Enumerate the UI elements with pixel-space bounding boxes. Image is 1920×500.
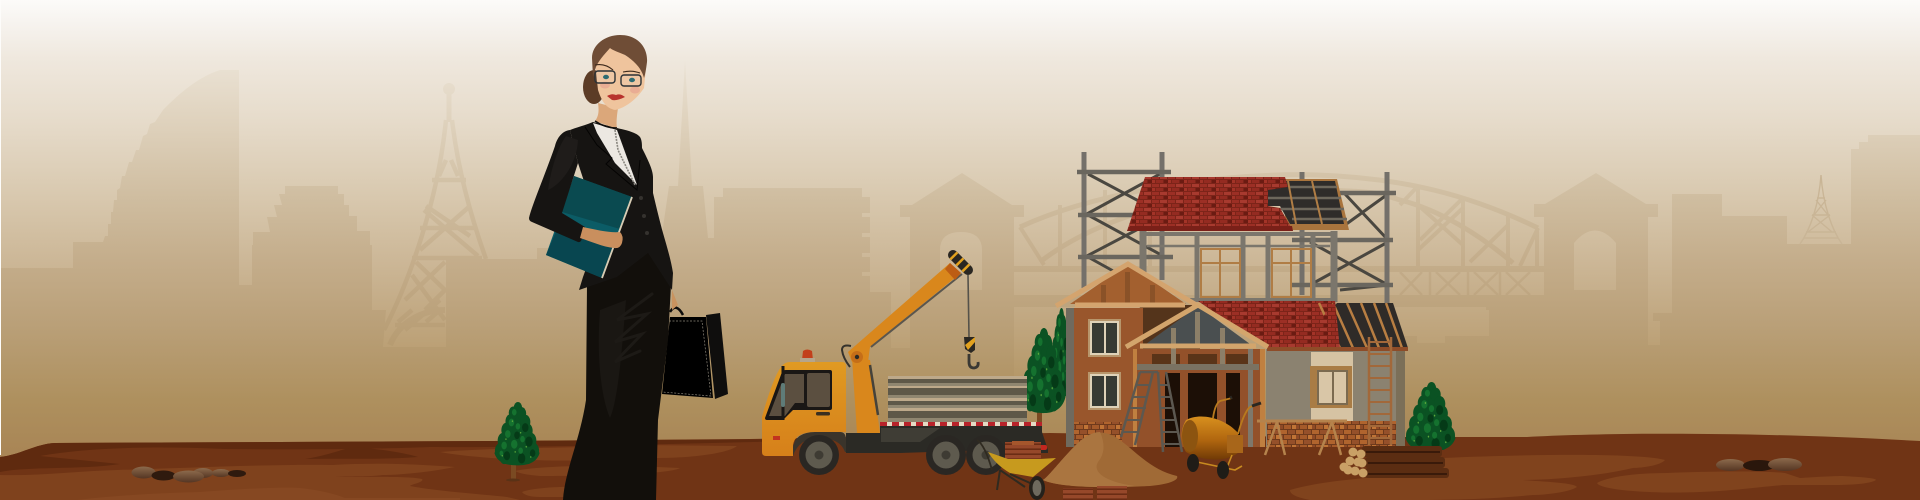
house: porch beam [1137,364,1259,370]
house: upper window right [1272,249,1311,297]
skyline: small eiffel tower [1800,175,1842,244]
crane: pivot [851,351,863,363]
woman: briefcase [662,308,728,399]
tree left [494,402,540,482]
house: front gable struts [1171,312,1225,364]
house: top red roof [1127,177,1293,231]
woman: neck [595,103,618,129]
truck: beacon [800,350,815,362]
ground base [0,433,1920,500]
wooden ladder [1369,337,1391,445]
house: grey porch post [1248,349,1253,447]
tree behind house [1037,308,1074,424]
sand pile [1043,432,1177,487]
house: front gable timber frame [1126,305,1268,347]
woman: skirt fold highlight [599,300,626,418]
ground: lightest left patch [77,488,460,500]
mixer: opening [1182,420,1198,452]
truck: cab [762,362,846,456]
ground: patch beside skirt [515,466,680,476]
scaffold: cross braces [1085,174,1388,290]
woman: folder [546,176,632,278]
crane: hook block [964,337,975,353]
skyline: left and centre buildings [1,60,1024,445]
woman: cheeks [600,82,640,94]
crane boom [842,263,962,433]
ground: dark lens patch [305,447,418,459]
woman: sleeve highlight [548,136,578,190]
rocks left [132,466,246,482]
woman: hair bun [583,70,605,104]
house: wing window lower [1088,372,1121,410]
tree beside truck [1020,328,1066,413]
house: gable struts [1101,272,1155,305]
woman: lips [607,94,625,100]
house: gable timber frame [1056,264,1198,306]
house: porch transom panels [1152,354,1248,364]
woman: jacket buttons [639,196,649,235]
truck: rear wheel two [966,435,1006,475]
house: gable fill [1070,264,1186,304]
woman: hand at briefcase [672,290,678,310]
ground [0,433,1920,500]
house: upper window left [1201,249,1240,297]
ground: right light patch one [1290,455,1665,500]
woman: necklace [615,130,635,185]
woman: hair [592,35,647,78]
wheelbarrow: tray [988,452,1056,477]
truck: steel sheet load [888,376,1027,422]
scaffolding [1077,152,1396,305]
truck: cab window frame [765,370,832,420]
sawhorses table [1257,421,1347,455]
house: top roof deck exposed [1262,179,1349,230]
crane: post [852,358,880,433]
truck: chassis [846,426,1048,453]
house: left wing wall [1067,308,1143,447]
ground: patch under left [522,487,600,497]
house: brick base right [1267,421,1396,447]
mixer: motor box [1227,435,1243,453]
house: door openings [1165,373,1240,447]
house: upper floor columns [1143,231,1337,447]
mixer: wheels [1187,454,1229,479]
house: right wing grey wall [1266,349,1404,447]
businesswoman [529,35,728,500]
truck: cab marker light [773,436,780,440]
woman: eyes [603,75,635,82]
wheelbarrow: bricks [1005,441,1041,462]
house: wing window upper [1088,319,1121,357]
brick stacks [1063,486,1127,500]
scaffold: posts [1084,152,1387,305]
wheelbarrow [977,440,1056,500]
truck: mirror [781,366,785,420]
crane: cable [968,275,969,337]
truck: rear wheel one [926,435,966,475]
mixer: frame [1197,455,1242,470]
scaffold: horizontal beams [1077,172,1396,285]
woman: skirt [563,250,671,500]
tree right [1406,382,1455,451]
woman: face [595,46,646,110]
woman: eyebrows [595,65,640,73]
wheelbarrow: wheel [1029,476,1045,500]
woman: lapel [585,127,640,190]
house: cream window [1310,366,1352,408]
truck: front wheel [799,435,839,475]
skyline: right buildings [1400,135,1920,445]
house: porch posts [1133,349,1265,447]
step ladder [1121,372,1182,452]
woman: collar [595,121,617,128]
crane: striped tip [953,255,968,270]
city skyline silhouette [1,60,1920,445]
truck: wheel arch [793,432,846,456]
rocks right [1716,458,1802,471]
house: top roof dark shading [1127,226,1293,231]
crane truck [762,255,1048,475]
house: left post [1066,308,1074,447]
house: front gable [1146,306,1250,344]
logs: cut ends [1340,448,1368,478]
mixer: drum [1182,416,1239,460]
truck: red white rail [880,422,1042,426]
ground: patches around the truck area [440,445,737,461]
woman: sleeve [529,130,585,242]
woman: blouse [593,123,637,185]
woman: skirt wrinkles [615,294,652,362]
crane: hook [969,354,978,368]
cement mixer [1182,397,1261,479]
truck: tail light [1038,445,1047,450]
house: eave [1267,347,1408,351]
house: lower wall side post [1396,349,1405,447]
skyline: left radio tower [384,83,486,345]
house: brick base left [1074,422,1122,446]
truck: door handle [816,412,830,416]
log pile [1340,446,1449,478]
house: exposed rafters [1315,301,1408,349]
crane: hydraulic [870,365,878,415]
left edge highlight [0,0,1,455]
house: porch wall [1133,349,1265,447]
house: plaster panel [1311,352,1353,422]
skyline: steel arch bridge [1014,175,1544,301]
truck: chassis side panel [881,428,940,442]
house: lower red roof [1198,301,1340,349]
house under construction [1056,177,1408,447]
crane: hose loop [842,346,851,367]
ground: dark upper band [0,439,800,472]
truck: cab window panes [769,373,830,416]
house: interior behind gable [1140,305,1200,445]
woman: jacket [570,122,673,290]
ground: right light patch two [1597,472,1876,493]
ground: light left patch [0,464,520,500]
woman: hand on folder [580,227,623,248]
woman: glasses [595,71,641,86]
